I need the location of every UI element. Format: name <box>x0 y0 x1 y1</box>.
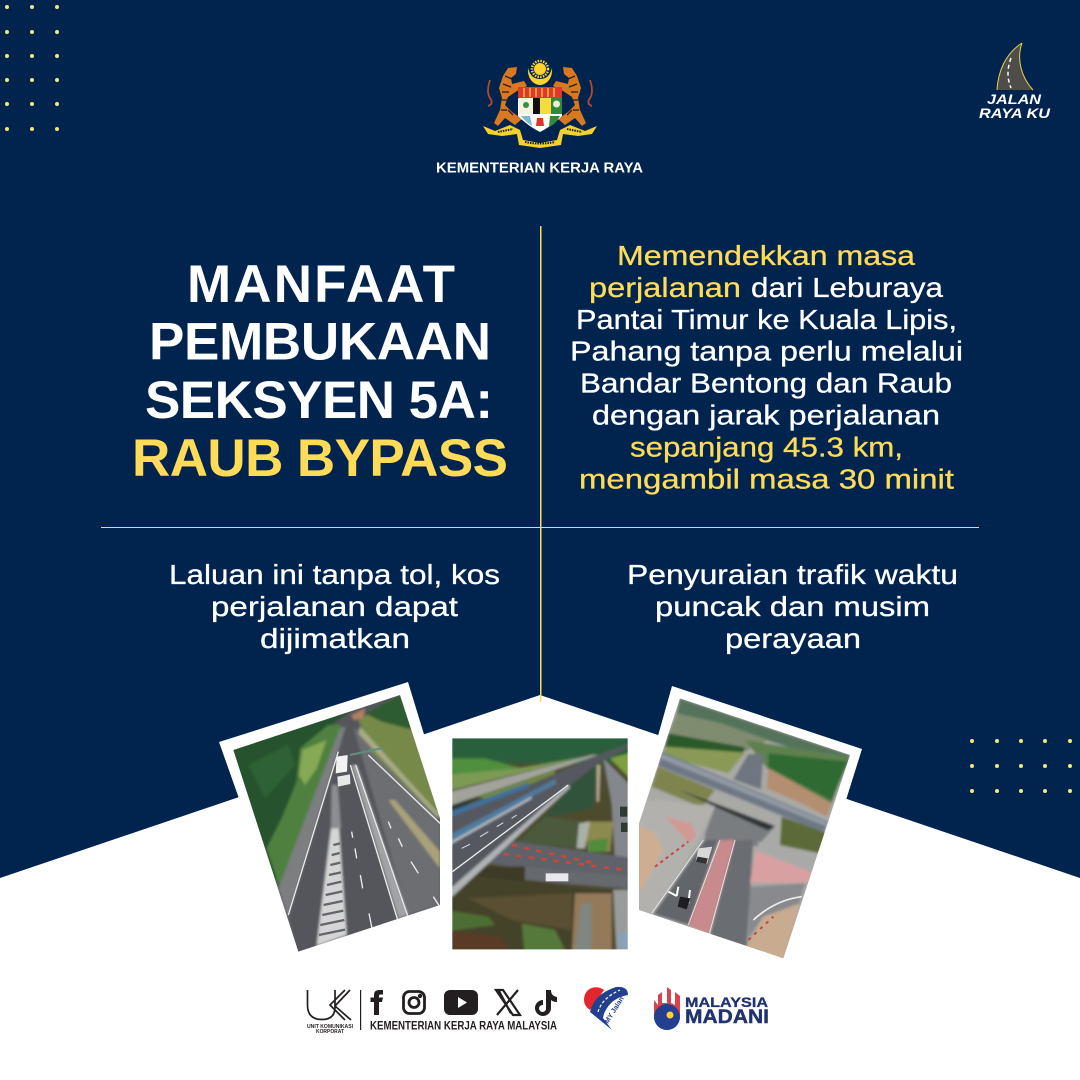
icon: Malaysia Madani logo: MADANI <box>685 1007 769 1028</box>
footer divider <box>360 990 361 1030</box>
photo right: interchange <box>635 686 862 963</box>
icon: UK corporate communications logo <box>307 990 353 1035</box>
footer ministry text: KEMENTERIAN KERJA RAYA MALAYSIA <box>370 1018 557 1032</box>
benefit text: toll free <box>169 559 500 654</box>
photo frame <box>640 686 862 960</box>
dot pattern: bottom right <box>970 739 1072 793</box>
photo frame <box>219 682 441 965</box>
icon: MyJalan heart logo: MY Jalan <box>604 996 626 1025</box>
benefit text: shorter travel time: Pantai Timur ke Kuala Lipis, <box>576 304 957 335</box>
white lower section <box>0 695 1080 1080</box>
tails <box>488 80 592 106</box>
shield <box>518 87 562 132</box>
benefit text: shorter travel time: dengan jarak perjalanan <box>592 400 940 430</box>
icon: Jalan Raya Ku logo: RAYA KU <box>979 105 1051 121</box>
icon: MyJalan heart logo <box>584 987 628 1030</box>
scroll <box>483 125 597 148</box>
benefit text: traffic dispersal: Penyuraian trafik waktu <box>627 559 958 590</box>
left tiger <box>494 67 527 126</box>
sun <box>532 61 548 77</box>
benefit text: traffic dispersal <box>627 559 958 654</box>
benefit text: traffic dispersal: perayaan <box>725 623 861 654</box>
road edges <box>997 43 1033 90</box>
heading: PEMBUKAAN <box>149 312 491 372</box>
left tiger stripes <box>501 76 513 115</box>
heading: MANFAAT <box>187 255 455 314</box>
icon: X <box>496 990 520 1015</box>
road shape <box>997 43 1033 90</box>
icon: Instagram <box>404 992 424 1014</box>
right tiger stripes <box>567 76 579 115</box>
icon: Malaysia Madani logo: MALAYSIA <box>685 994 768 1010</box>
icon: UK corporate communications logo: UNIT KOMUNIKASI <box>307 1024 353 1030</box>
benefit text: shorter travel time: mengambil masa 30 minit <box>579 464 954 494</box>
logo text: JALAN <box>987 91 1042 107</box>
benefit text: shorter travel time: Pahang tanpa perlu melalui <box>570 336 963 366</box>
benefit text: toll free: dijimatkan <box>260 623 410 654</box>
icon: TikTok <box>535 990 557 1016</box>
heading: SEKSYEN 5A: <box>145 371 493 430</box>
icon: YouTube <box>444 990 478 1015</box>
benefit text: shorter travel time: perjalanan <box>589 272 741 303</box>
horizontal divider <box>101 527 979 528</box>
ministry name: KEMENTERIAN KERJA RAYA <box>436 160 643 176</box>
benefit text: shorter travel time: sepanjang 45.3 km, <box>630 432 903 462</box>
benefit text: shorter travel time: dari Leburaya <box>751 272 943 303</box>
benefit text: shorter travel time <box>570 240 963 494</box>
crescent <box>528 68 552 85</box>
benefit text: shorter travel time: Memendekkan masa <box>617 240 915 271</box>
centre line <box>1008 58 1011 88</box>
dot pattern: top left <box>5 5 59 131</box>
right tiger <box>553 67 586 126</box>
benefit text: shorter travel time: Bandar Bentong dan Raub <box>580 368 952 398</box>
photo left: highway with toll lanes <box>219 682 452 965</box>
benefit text: toll free: Laluan ini tanpa tol, kos <box>169 559 500 590</box>
heading <box>132 255 508 488</box>
icon: Malaysia Madani logo <box>654 987 769 1030</box>
photo centre: flyover <box>452 738 628 950</box>
icon: Facebook <box>370 990 383 1015</box>
heading: RAUB BYPASS <box>132 429 508 488</box>
benefit text: traffic dispersal: puncak dan musim <box>655 591 930 622</box>
icon: Malaysian coat of arms <box>483 61 597 148</box>
icon: UK corporate communications logo: KORPORAT <box>316 1029 345 1035</box>
vertical divider <box>540 226 542 702</box>
icon: Jalan Raya Ku logo <box>979 43 1051 121</box>
benefit text: toll free: perjalanan dapat <box>211 591 458 622</box>
